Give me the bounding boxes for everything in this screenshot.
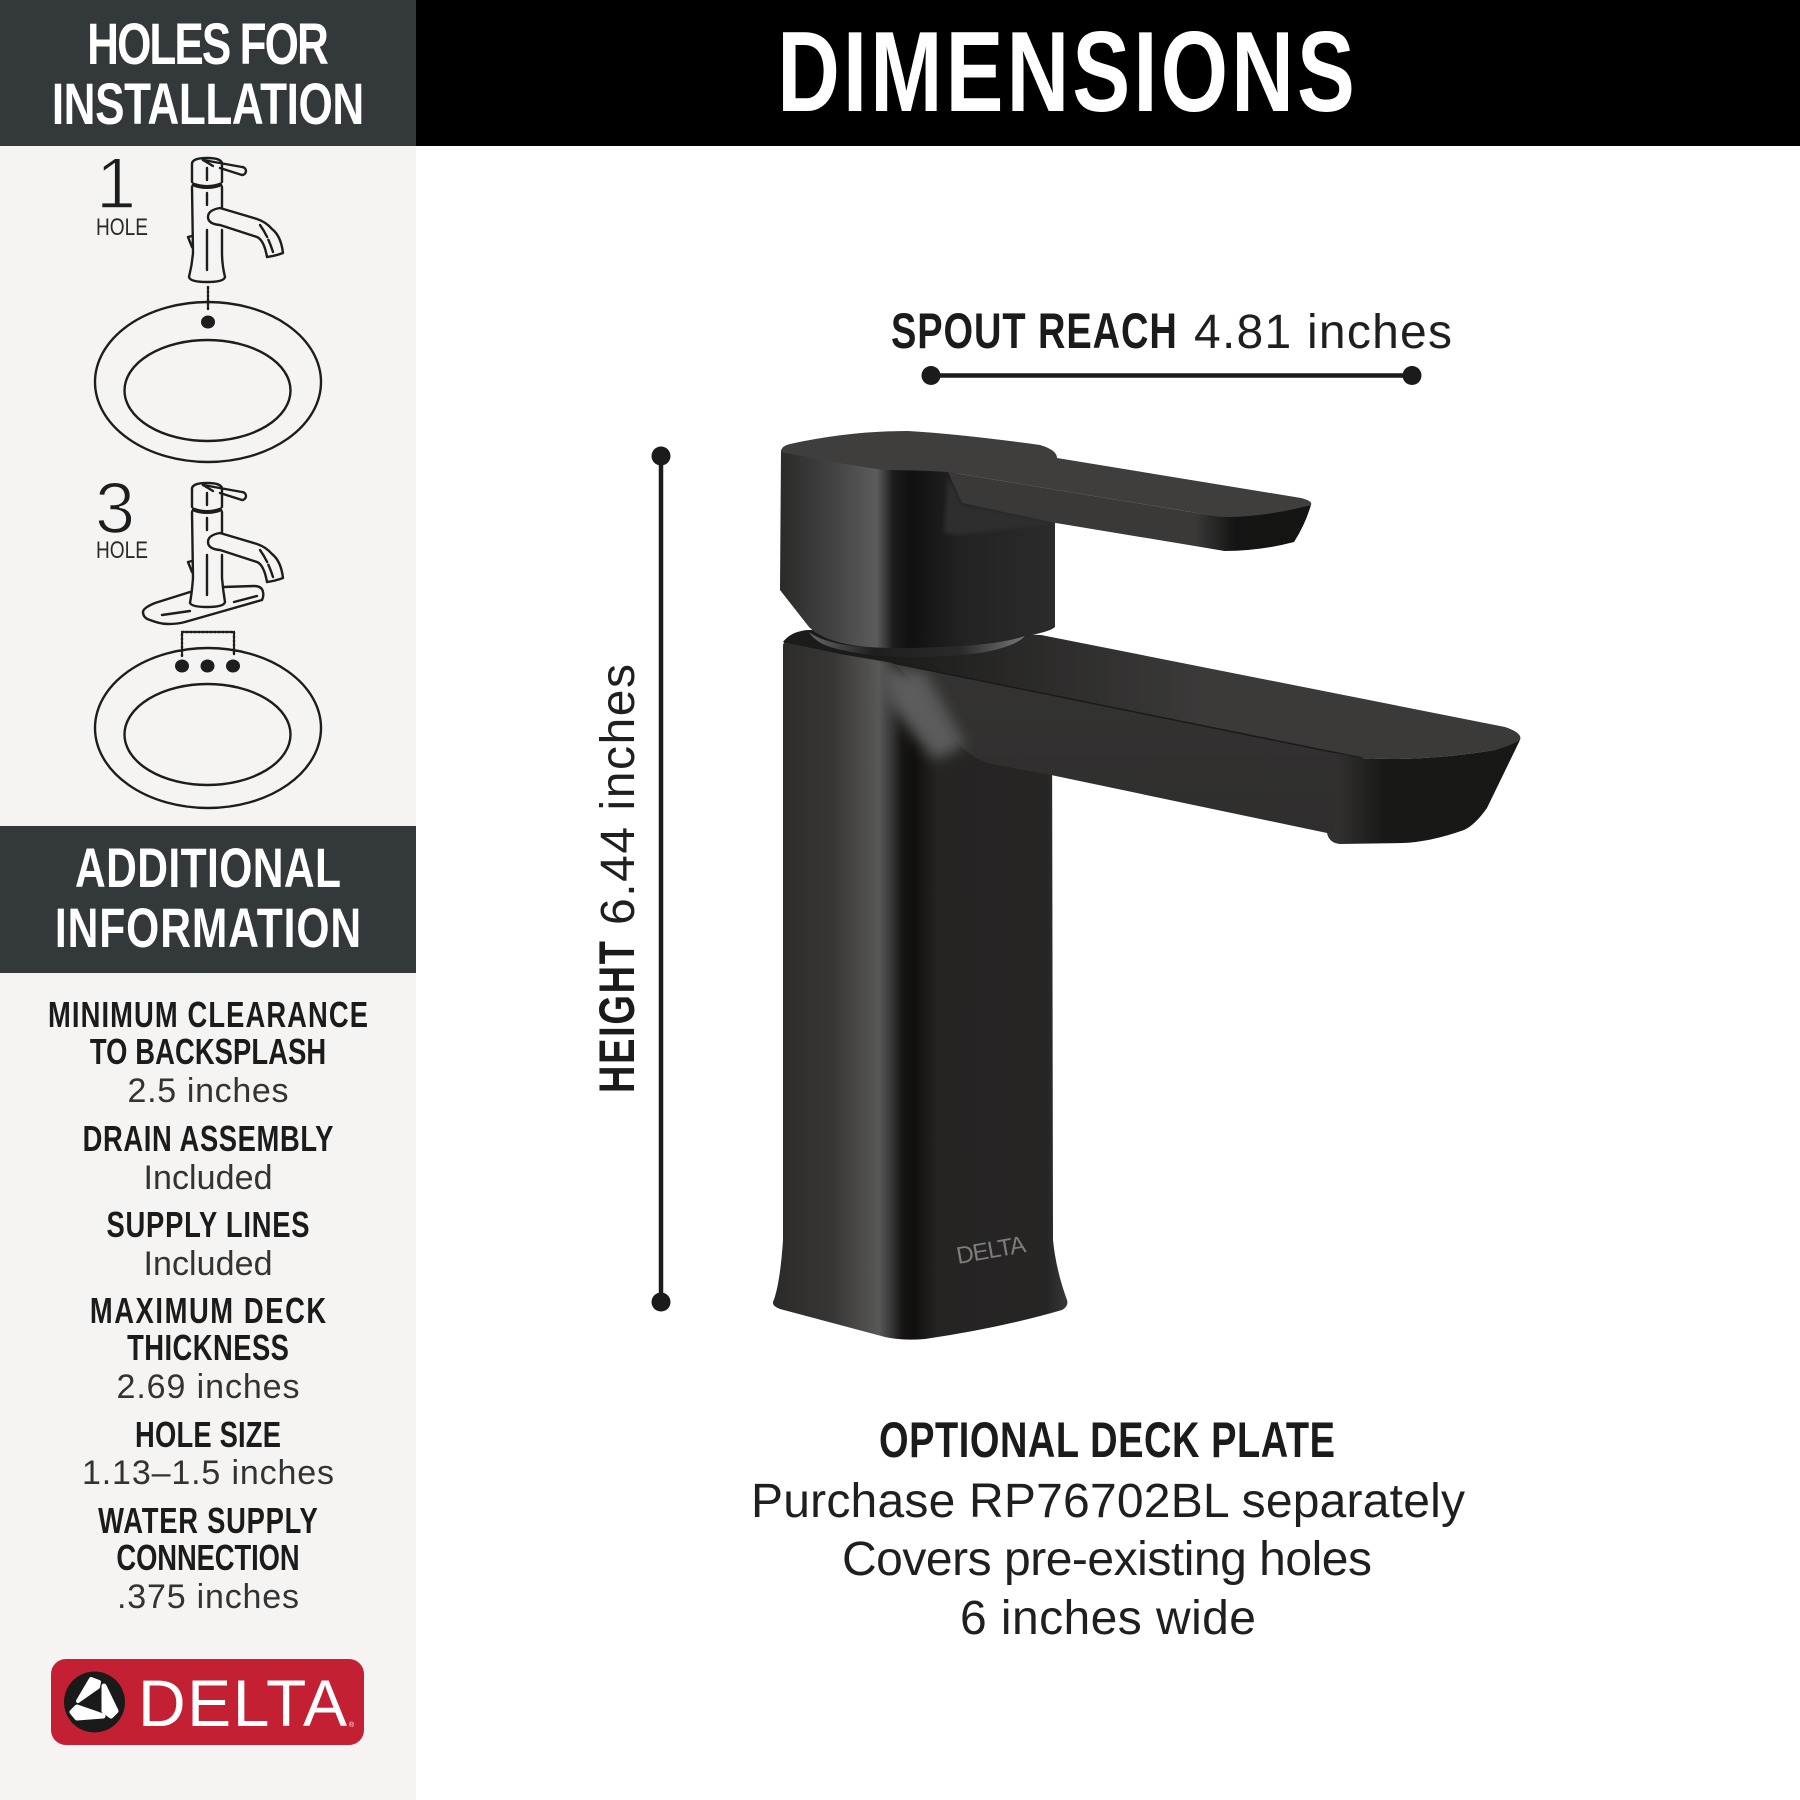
text: optional deck plate: OPTIONAL DECK PLATE [879,1413,1335,1468]
text: supply lines: Included [144,1245,272,1283]
text: hole size [82,1414,334,1492]
heading: additional information: INFORMATION [55,896,361,959]
spout side [893,663,1375,838]
heading: dimensions banner: DIMENSIONS [777,9,1355,136]
handle top [781,431,1311,517]
text: water supply connection: .375 inches [117,1578,299,1616]
dimension: spout reach: SPOUT REACH [891,304,1177,359]
faucet body [773,630,1067,1340]
text: water supply connection: WATER SUPPLY [98,1500,318,1541]
text: supply lines: SUPPLY LINES [107,1204,309,1245]
text: maximum deck thickness: MAXIMUM DECK [90,1290,326,1331]
text: hole size: HOLE SIZE [135,1414,281,1455]
text: maximum deck thickness [90,1290,326,1406]
diagram: one hole installation: HOLE [96,214,148,241]
heading: additional information [0,826,416,973]
diagram: one hole installation: 1 [96,144,136,224]
spout top [783,630,1520,759]
dimension: spout reach: 4.81 inches [1194,306,1452,359]
lever end [1190,505,1311,551]
handle column [780,450,1055,648]
text: maximum deck thickness: THICKNESS [127,1327,289,1368]
text: water supply connection: CONNECTION [116,1537,300,1578]
corner highlight [880,668,965,760]
brand mark: DELTA [954,1231,1028,1270]
text: hole size: 1.13–1.5 inches [82,1454,334,1492]
text: drain assembly: DRAIN ASSEMBLY [83,1118,333,1159]
dimension: height: 6.44 inches [592,664,645,925]
heading: holes for installation [0,0,416,146]
illustration: faucet [773,431,1520,1340]
diagram: three hole installation: 3 [95,469,135,549]
diagram: three hole installation: HOLE [96,537,148,564]
text: water supply connection [98,1500,318,1616]
dimension: spout reach [891,304,1452,385]
lever joint shadow [944,476,1056,535]
lever side [948,472,1225,551]
text: optional deck plate: Purchase RP76702BL separately [751,1475,1465,1528]
text: maximum deck thickness: 2.69 inches [116,1368,300,1406]
heading: additional information: ADDITIONAL [75,836,341,899]
dimension: height: HEIGHT [590,941,645,1093]
spout end [1327,740,1520,844]
logo: delta: ® [349,1721,355,1729]
text: minimum clearance: MINIMUM CLEARANCE [48,994,368,1035]
heading: dimensions banner [416,0,1800,146]
text: minimum clearance [48,994,368,1110]
heading: holes for installation: INSTALLATION [52,71,364,136]
text: minimum clearance: TO BACKSPLASH [90,1031,326,1072]
text: drain assembly: Included [144,1159,272,1197]
panel: left sidebar [0,0,416,1800]
text: drain assembly [83,1118,333,1197]
text: minimum clearance: 2.5 inches [128,1072,288,1110]
diagram: three hole installation [95,469,321,808]
logo: delta [51,1659,364,1745]
text: optional deck plate [751,1413,1465,1645]
heading: holes for installation: HOLES FOR [87,11,329,76]
text: optional deck plate: Covers pre-existing holes [842,1533,1372,1586]
dimension: height [590,446,670,1312]
ring [809,632,1025,657]
text: optional deck plate: 6 inches wide [960,1592,1256,1645]
logo: delta: DELTA [138,1666,347,1740]
text: supply lines [107,1204,309,1283]
diagram: one hole installation [95,144,321,462]
